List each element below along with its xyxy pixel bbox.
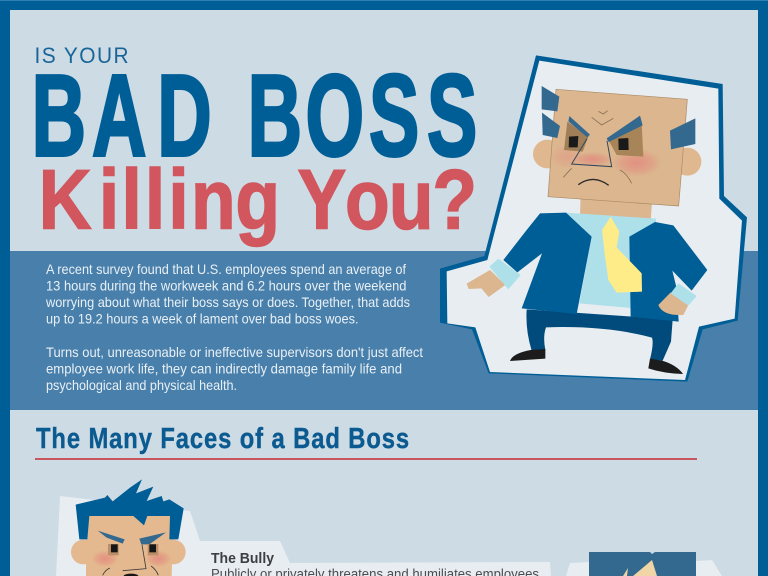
bully panel backdrop <box>56 496 551 576</box>
hair <box>76 479 184 539</box>
ears <box>71 540 186 564</box>
jacket <box>503 213 707 322</box>
intro text <box>45 262 423 393</box>
head <box>548 89 687 206</box>
intro text: Turns out, unreasonable or ineffective supervisors don't just affect <box>46 345 423 360</box>
intro text: up to 19.2 hours a week of lament over bad boss woes. <box>46 312 358 326</box>
nose <box>123 545 146 571</box>
section heading: The Many Faces of a Bad Boss <box>36 422 409 455</box>
illustration: the bully <box>71 479 186 576</box>
title line: is your: IS YOUR <box>34 44 129 68</box>
heading underline <box>35 458 697 460</box>
right hand and cuff <box>658 283 697 315</box>
cheek blush <box>92 550 172 567</box>
eyes <box>564 122 643 157</box>
intro text: worrying about what their boss says or does. Together, that adds <box>45 295 410 310</box>
tie <box>602 217 642 293</box>
face sliver <box>633 560 657 576</box>
trousers <box>526 309 673 361</box>
intro text: employee work life, they can indirectly damage family life and <box>46 362 402 376</box>
nose <box>572 139 612 167</box>
title line: killing you: Killing You? <box>39 153 477 247</box>
dark hair block <box>589 552 696 576</box>
cheek lines and mouth <box>103 566 158 576</box>
frown and wrinkles <box>563 111 632 185</box>
shoes <box>510 349 683 374</box>
face <box>86 513 173 576</box>
hair tufts <box>542 86 695 149</box>
intro text: psychological and physical health. <box>46 378 237 393</box>
intro text: 13 hours during the workweek and 6.2 hours over the weekend <box>46 278 406 294</box>
intro band <box>10 251 758 410</box>
ears <box>533 140 701 176</box>
intro text: A recent survey found that U.S. employees spend an average of <box>46 262 406 277</box>
neck <box>580 195 652 222</box>
eyebrows <box>568 116 643 142</box>
cheek blush <box>550 145 662 177</box>
left cuff and pointing hand <box>467 259 521 297</box>
eyebrows <box>98 531 166 544</box>
illustration: angry boss <box>440 55 747 382</box>
shirt <box>566 213 656 308</box>
illustration: second boss <box>589 552 696 576</box>
bully text: The Bully <box>211 550 275 567</box>
title line: bad boss: BAD BOSS <box>32 50 477 180</box>
bully text <box>211 550 539 576</box>
second boss backdrop <box>566 560 722 576</box>
title <box>32 44 477 247</box>
eyes <box>108 544 158 555</box>
boss backdrop <box>440 55 747 382</box>
